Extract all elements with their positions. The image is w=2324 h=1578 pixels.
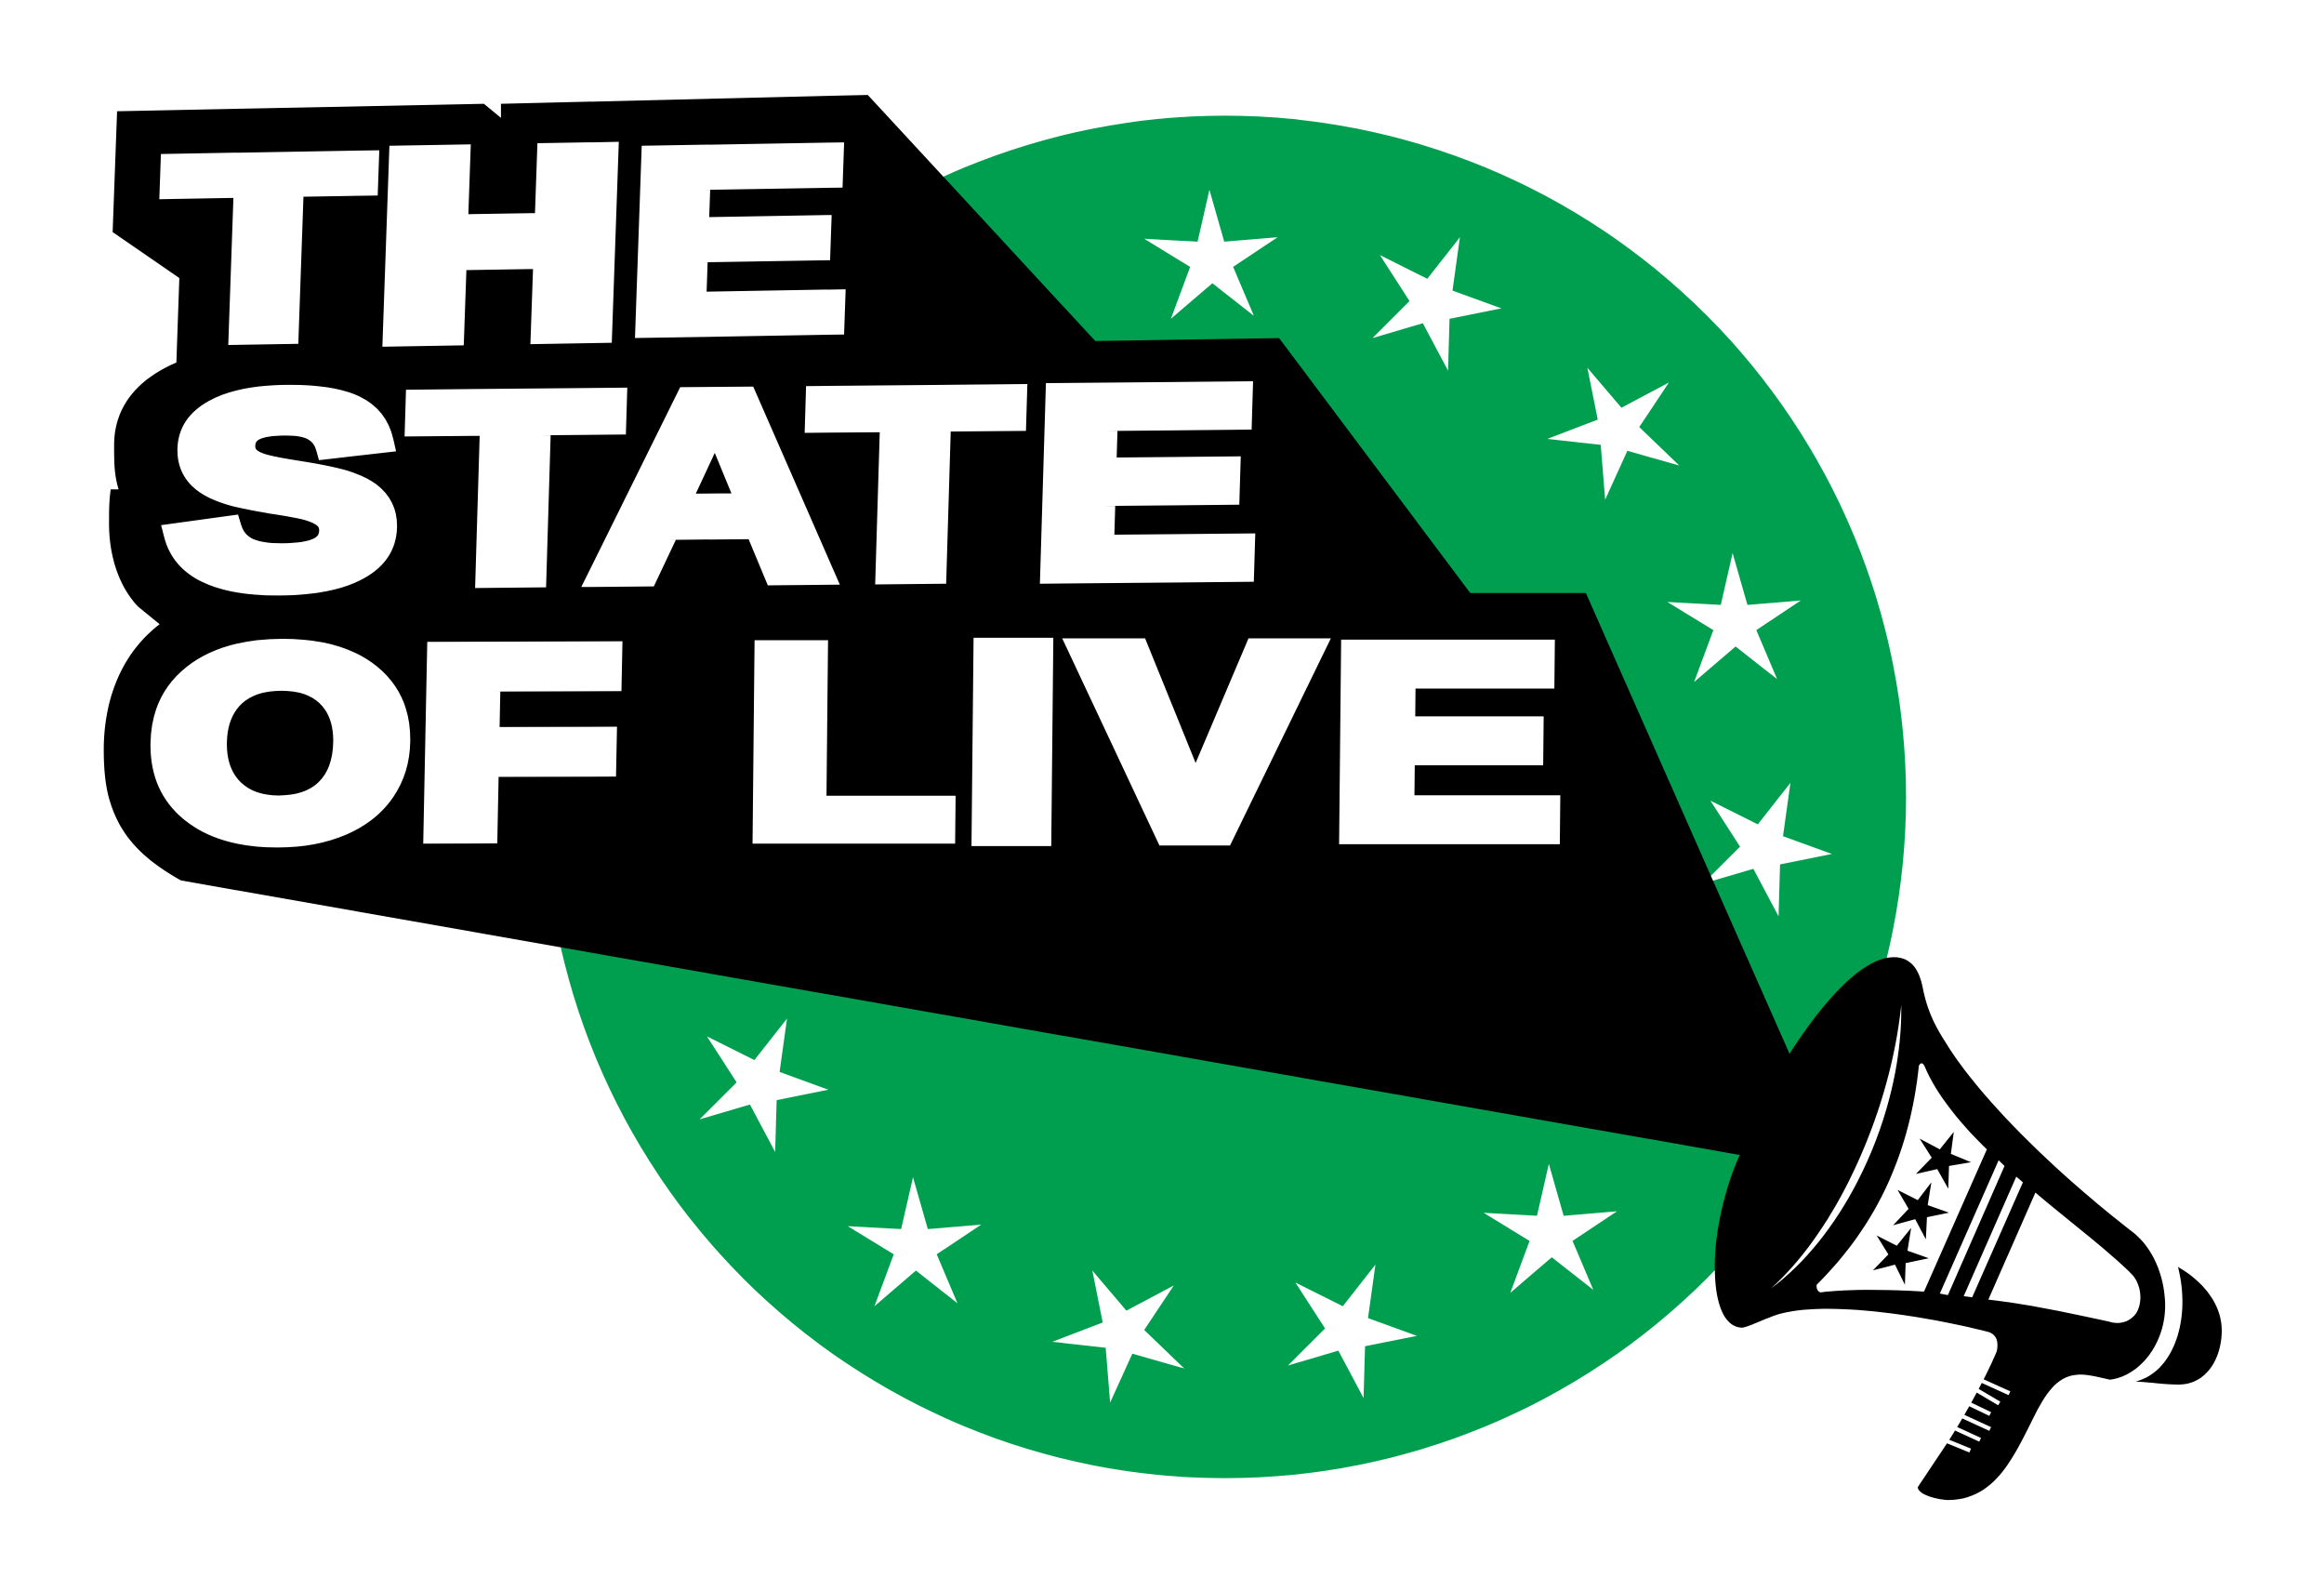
black sound-wedge banner — [104, 95, 1789, 1155]
title line: LIVE: E — [1327, 592, 1564, 895]
title line: THE: T — [160, 105, 374, 393]
star 2 — [1372, 237, 1501, 371]
icon: megaphone — [1715, 957, 2222, 1500]
title line: STATE: T — [806, 337, 1022, 634]
title line: THE: H — [376, 100, 626, 391]
black star 1 — [1916, 1132, 1971, 1188]
title line: STATE: E — [1028, 335, 1262, 632]
white stripe 2 — [1963, 1176, 2023, 1297]
title line: OF: O — [148, 596, 414, 892]
black star 2 — [1894, 1182, 1949, 1240]
star 4 — [1668, 553, 1801, 682]
title line: LIVE: I — [962, 592, 1063, 895]
title line: STATE: T — [406, 340, 621, 638]
star 1 — [1144, 190, 1277, 319]
star 9 — [848, 1177, 981, 1306]
star 3 — [1548, 367, 1679, 499]
title line: THE: E — [622, 97, 854, 386]
black star 3 — [1873, 1227, 1929, 1285]
white stripe 1 — [1940, 1160, 2004, 1295]
handle grip ribs — [1945, 1381, 2010, 1451]
green circle background — [544, 115, 1906, 1479]
star 6 — [1484, 1164, 1617, 1293]
white rear panel — [1988, 1192, 2140, 1323]
title line: LIVE: V — [1077, 592, 1314, 895]
white crescent highlight — [1771, 1005, 1901, 1289]
white panel holding stars — [1816, 1064, 1987, 1293]
megaphone rear cap — [2135, 1266, 2222, 1385]
star 8 — [1052, 1270, 1184, 1402]
title line: OF: F — [413, 596, 623, 892]
title line: STATE: A — [588, 338, 840, 636]
star 7 — [1288, 1265, 1417, 1399]
megaphone body — [1715, 957, 2222, 1500]
title line: LIVE: L — [740, 592, 957, 895]
star 10 — [700, 1018, 828, 1152]
title — [148, 97, 1564, 895]
title line: STATE: S — [166, 342, 401, 640]
megaphone horn and handle — [1715, 957, 2165, 1500]
star 5 — [1703, 783, 1832, 916]
ring of white stars — [700, 190, 1832, 1402]
